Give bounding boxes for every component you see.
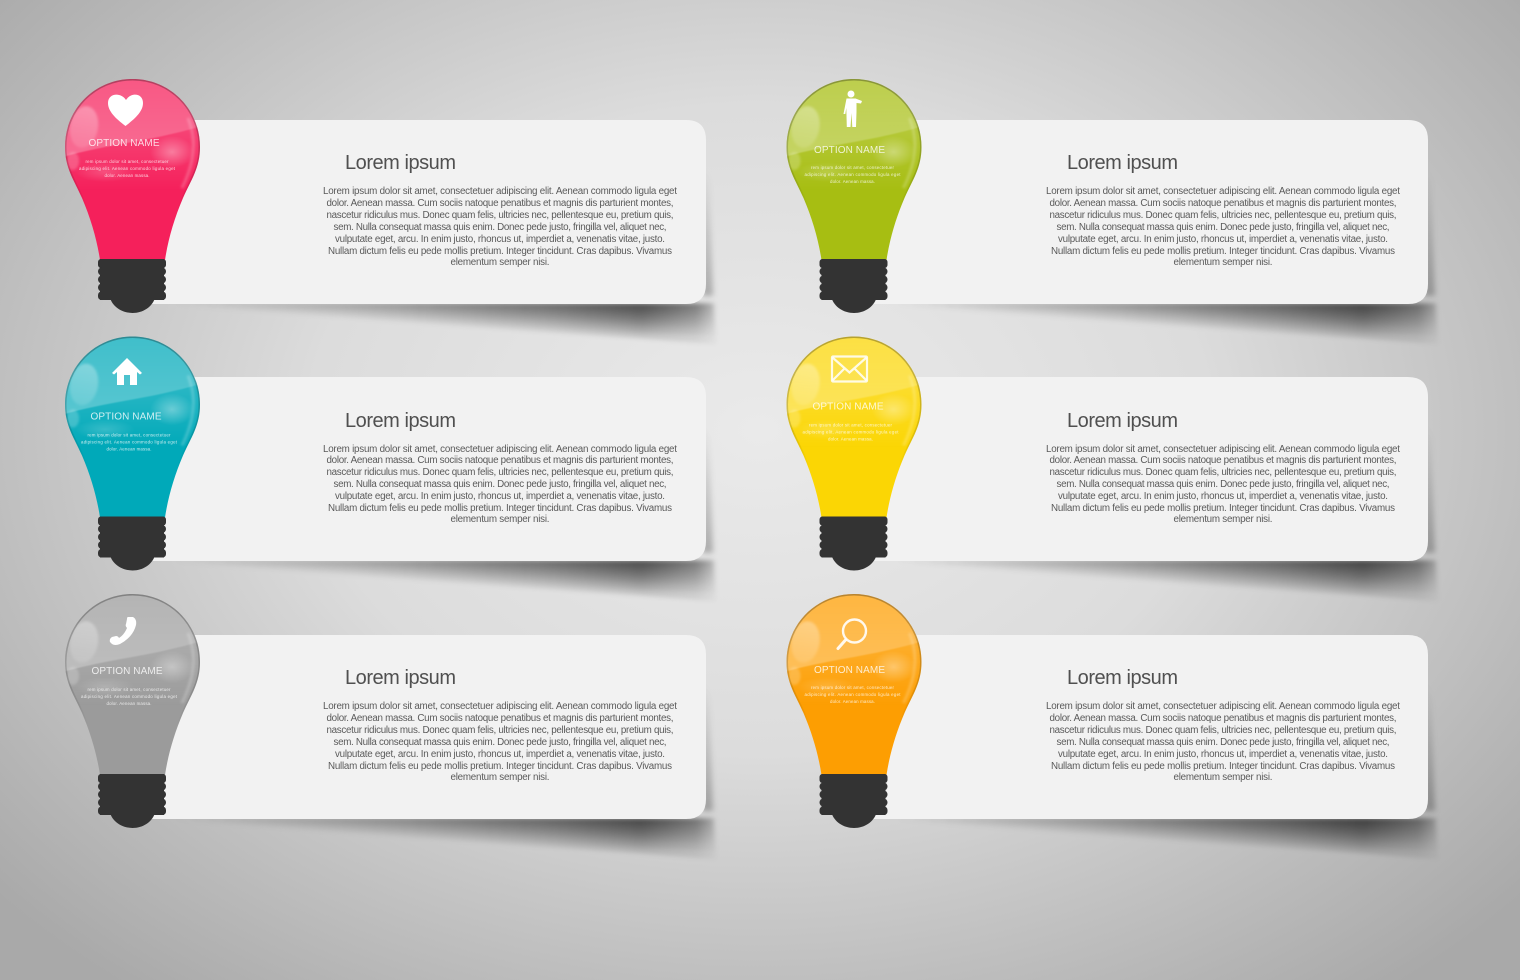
card 5 text: Lorem ipsum dolor sit amet, consectetuer adipiscing elit. Aenean commodo ligula eget — [1046, 444, 1400, 455]
icon: magnifier — [838, 620, 866, 648]
card 1 text — [323, 186, 677, 268]
card 5 text: Nullam dictum felis eu pede mollis pretium. Integer tincidunt. Cras dapibus. Vivamus — [1051, 503, 1395, 514]
icon: person — [844, 90, 862, 127]
card 2 text — [323, 444, 677, 525]
card 1 text: Lorem ipsum dolor sit amet, consectetuer adipiscing elit. Aenean commodo ligula eget — [323, 186, 677, 197]
card 4 text: nascetur ridiculus mus. Donec quam felis, ultricies nec, pellentesque eu, pretium quis, — [1050, 210, 1396, 221]
grey small text — [81, 687, 178, 706]
panel: card 3 — [140, 635, 716, 859]
green small text: rem ipsum dolor sit amet, consectetuer — [811, 165, 895, 170]
card 2 body — [140, 377, 706, 561]
grey small text: adipiscing elit. Aenean commodo ligula eget — [81, 694, 178, 699]
card 3 text: Lorem ipsum dolor sit amet, consectetuer adipiscing elit. Aenean commodo ligula eget — [323, 701, 677, 712]
card 3 text: vulputate eget, arcu. In enim justo, rhoncus ut, imperdiet a, venenatis vitae, justo. — [335, 749, 665, 760]
orange small text: dolor. Aenean massa. — [830, 699, 875, 704]
orange option label: OPTION NAME — [814, 665, 885, 676]
card 5 text: vulputate eget, arcu. In enim justo, rhoncus ut, imperdiet a, venenatis vitae, justo. — [1058, 491, 1388, 502]
yellow small text: dolor. Aenean massa. — [828, 436, 873, 442]
card 2 text: vulputate eget, arcu. In enim justo, rhoncus ut, imperdiet a, venenatis vitae, justo. — [335, 491, 665, 502]
bulb: orange — [782, 590, 926, 828]
green small text: dolor. Aenean massa. — [830, 179, 875, 184]
card 3 heading: Lorem ipsum — [345, 667, 456, 689]
card 1 text: dolor. Aenean massa. Cum sociis natoque penatibus et magnis dis parturient montes, — [326, 198, 674, 209]
card 3 text: dolor. Aenean massa. Cum sociis natoque penatibus et magnis dis parturient montes, — [326, 713, 674, 724]
icon: telephone — [110, 617, 136, 645]
panel: card 2 — [140, 377, 716, 601]
card 6 body — [862, 635, 1428, 819]
yellow small text — [802, 422, 899, 442]
card 3 text — [323, 701, 677, 783]
teal small text — [81, 432, 178, 452]
card 1 heading: Lorem ipsum — [345, 152, 456, 174]
card 2 shadow — [170, 422, 716, 601]
card 6 text: nascetur ridiculus mus. Donec quam felis, ultricies nec, pellentesque eu, pretium quis, — [1050, 725, 1396, 736]
grey option label: OPTION NAME — [92, 666, 163, 677]
card 5 text: dolor. Aenean massa. Cum sociis natoque penatibus et magnis dis parturient montes, — [1050, 455, 1396, 466]
card 4 text: vulputate eget, arcu. In enim justo, rhoncus ut, imperdiet a, venenatis vitae, justo. — [1058, 234, 1388, 245]
orange small text — [804, 685, 901, 704]
card 4 text: Lorem ipsum dolor sit amet, consectetuer adipiscing elit. Aenean commodo ligula eget — [1046, 186, 1400, 197]
card 6 text: Nullam dictum felis eu pede mollis pretium. Integer tincidunt. Cras dapibus. Vivamus — [1051, 761, 1395, 772]
card 4 text: dolor. Aenean massa. Cum sociis natoque penatibus et magnis dis parturient montes, — [1050, 198, 1396, 209]
card 1 text: sem. Nulla consequat massa quis enim. Donec pede justo, fringilla vel, aliquet nec, — [334, 222, 666, 233]
bulb: green — [782, 75, 926, 313]
grey small text: rem ipsum dolor sit amet, consectetuer — [88, 687, 171, 692]
card 4 text: Nullam dictum felis eu pede mollis pretium. Integer tincidunt. Cras dapibus. Vivamus — [1051, 246, 1395, 257]
card 2 text: Lorem ipsum dolor sit amet, consectetuer adipiscing elit. Aenean commodo ligula eget — [323, 444, 677, 455]
card 6 text — [1046, 701, 1400, 783]
panel: card 1 — [140, 120, 716, 344]
orange small text: rem ipsum dolor sit amet, consectetuer — [811, 685, 895, 690]
teal small text: adipiscing elit. Aenean commodo ligula eget — [81, 440, 178, 444]
card 2 text: Nullam dictum felis eu pede mollis pretium. Integer tincidunt. Cras dapibus. Vivamus — [328, 503, 672, 514]
card 3 text: Nullam dictum felis eu pede mollis pretium. Integer tincidunt. Cras dapibus. Vivamus — [328, 761, 672, 772]
card 2 text: sem. Nulla consequat massa quis enim. Donec pede justo, fringilla vel, aliquet nec, — [334, 479, 666, 490]
card 3 text: nascetur ridiculus mus. Donec quam felis, ultricies nec, pellentesque eu, pretium quis, — [326, 725, 674, 736]
card 2 text: dolor. Aenean massa. Cum sociis natoque penatibus et magnis dis parturient montes, — [326, 455, 674, 466]
card 1 text: elementum semper nisi. — [450, 257, 550, 268]
card 6 text: sem. Nulla consequat massa quis enim. Donec pede justo, fringilla vel, aliquet nec, — [1056, 737, 1390, 748]
teal small text: dolor. Aenean massa. — [106, 446, 152, 452]
pink small text: rem ipsum dolor sit amet, consectetuer — [86, 159, 169, 164]
card 3 text: elementum semper nisi. — [450, 772, 550, 783]
card 2 heading: Lorem ipsum — [345, 410, 456, 432]
card 5 text: nascetur ridiculus mus. Donec quam felis, ultricies nec, pellentesque eu, pretium quis, — [1050, 467, 1396, 478]
card 4 text: elementum semper nisi. — [1174, 257, 1272, 268]
orange small text: adipiscing elit. Aenean commodo ligula eget — [804, 692, 901, 697]
card 5 text: elementum semper nisi. — [1174, 514, 1272, 525]
green small text: adipiscing elit. Aenean commodo ligula eget — [804, 172, 901, 177]
card 6 shadow — [892, 680, 1438, 859]
bulb: grey — [60, 590, 205, 828]
card 5 text — [1046, 444, 1400, 525]
card 4 heading: Lorem ipsum — [1067, 152, 1178, 174]
card 4 text: sem. Nulla consequat massa quis enim. Donec pede justo, fringilla vel, aliquet nec, — [1056, 222, 1390, 233]
card 6 text: Lorem ipsum dolor sit amet, consectetuer adipiscing elit. Aenean commodo ligula eget — [1046, 701, 1400, 712]
yellow small text: adipiscing elit. Aenean commodo ligula eget — [802, 430, 899, 434]
pink option label: OPTION NAME — [88, 138, 160, 149]
card 5 heading: Lorem ipsum — [1067, 410, 1178, 432]
yellow option label: OPTION NAME — [812, 402, 884, 412]
card 6 text: vulputate eget, arcu. In enim justo, rhoncus ut, imperdiet a, venenatis vitae, justo. — [1058, 749, 1388, 760]
bulb: pink — [60, 75, 205, 313]
teal option label: OPTION NAME — [90, 412, 162, 422]
card 5 text: sem. Nulla consequat massa quis enim. Donec pede justo, fringilla vel, aliquet nec, — [1056, 479, 1390, 490]
card 6 heading: Lorem ipsum — [1067, 667, 1178, 689]
bulb: yellow — [782, 332, 926, 570]
yellow small text: rem ipsum dolor sit amet, consectetuer — [809, 422, 893, 428]
card 5 shadow — [892, 422, 1438, 601]
card 1 shadow — [170, 165, 716, 344]
card 1 text: Nullam dictum felis eu pede mollis pretium. Integer tincidunt. Cras dapibus. Vivamus — [328, 246, 672, 257]
panel: card 5 — [862, 377, 1438, 601]
card 5 body — [862, 377, 1428, 561]
bulb: teal — [60, 332, 205, 570]
card 3 body — [140, 635, 706, 819]
teal small text: rem ipsum dolor sit amet, consectetuer — [88, 432, 171, 438]
green option label: OPTION NAME — [814, 145, 885, 156]
green small text — [804, 165, 901, 184]
icon: envelope — [832, 356, 867, 382]
card 6 text: elementum semper nisi. — [1174, 772, 1272, 783]
card 4 body — [862, 120, 1428, 304]
icon: house — [112, 358, 142, 385]
card 6 text: dolor. Aenean massa. Cum sociis natoque penatibus et magnis dis parturient montes, — [1050, 713, 1396, 724]
panel: card 6 — [862, 635, 1438, 859]
card 4 text — [1046, 186, 1400, 268]
card 2 text: nascetur ridiculus mus. Donec quam felis, ultricies nec, pellentesque eu, pretium quis, — [326, 467, 674, 478]
icon: heart — [108, 95, 143, 126]
pink small text: adipiscing elit. Aenean commodo ligula eget — [79, 166, 176, 171]
card 1 body — [140, 120, 706, 304]
card 3 text: sem. Nulla consequat massa quis enim. Donec pede justo, fringilla vel, aliquet nec, — [334, 737, 666, 748]
panel: card 4 — [862, 120, 1438, 344]
pink small text — [79, 159, 176, 178]
card 2 text: elementum semper nisi. — [450, 514, 550, 525]
card 3 shadow — [170, 680, 716, 859]
grey small text: dolor. Aenean massa. — [106, 701, 152, 706]
pink small text: dolor. Aenean massa. — [104, 173, 150, 178]
card 1 text: nascetur ridiculus mus. Donec quam felis, ultricies nec, pellentesque eu, pretium quis, — [326, 210, 674, 221]
card 4 shadow — [892, 165, 1438, 344]
card 1 text: vulputate eget, arcu. In enim justo, rhoncus ut, imperdiet a, venenatis vitae, justo. — [335, 234, 665, 245]
